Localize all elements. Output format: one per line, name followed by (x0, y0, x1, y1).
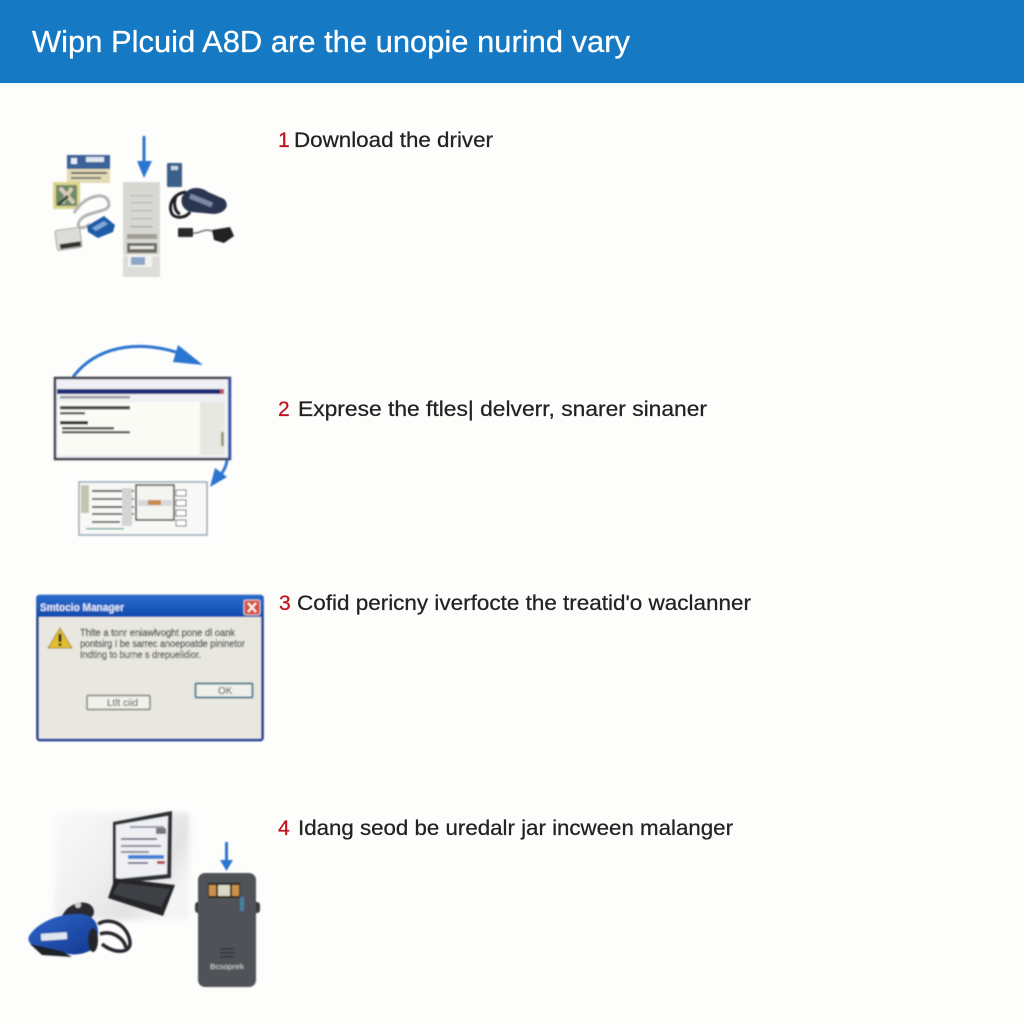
step 1 text: 1 (278, 129, 290, 152)
step 2 panel (55, 345, 707, 535)
dialog window (38, 596, 262, 740)
step 3 text: 3 (279, 592, 291, 615)
icon: lower window (79, 482, 207, 535)
icon: handheld scanner (195, 873, 260, 987)
arrow: download (137, 136, 152, 178)
button: secondary (87, 696, 150, 710)
step 4 text: 4 (278, 817, 290, 840)
icon: cable (98, 921, 130, 951)
arrow: curved top arrow (73, 345, 203, 377)
dialog message: Indting to burne s drepuelidior. (80, 650, 201, 661)
icon: warning triangle (48, 628, 72, 648)
dialog message: Thlte a tonr eniawlvoght pone dl oank (80, 628, 236, 639)
icon: program windows with arrows (55, 345, 231, 535)
step 4 text: Idang seod be uredalr jar incween malanger (298, 817, 733, 840)
icon: blue adapter (87, 216, 115, 238)
dialog title bar (37, 595, 263, 617)
arrow: lower curved arrow (210, 460, 227, 487)
icon: main window (55, 378, 231, 459)
step 3 panel (37, 592, 751, 740)
header banner (0, 0, 1024, 83)
dialog message: pontsirg I be sarrec anoepoatde pininetor (80, 639, 246, 650)
icon: central device (123, 182, 160, 277)
step 4 panel (28, 811, 733, 987)
dialog title bar: Smtocio Manager (40, 602, 125, 614)
icon: navy handset (167, 163, 182, 187)
arrow: down to scanner (220, 842, 233, 871)
button: OK: OK (218, 686, 233, 697)
step 3 text: Cofid pericny iverfocte the treatid'o waclanner (297, 592, 751, 615)
icon: handheld scanner: Bcsoprek (210, 962, 244, 971)
icon: close button (244, 600, 260, 615)
icon: white cable (74, 196, 109, 228)
title: Wipn Plcuid A8D are the unopie nurind vary (32, 24, 630, 59)
icon: monitor (108, 811, 175, 916)
icon: small black adapters (178, 227, 234, 243)
icon: silver module (55, 227, 82, 251)
icon: blue car (28, 902, 98, 957)
icon: device manager dialog (37, 595, 263, 740)
backdrop (55, 813, 189, 920)
button: secondary: Ltlt ciid (107, 698, 138, 709)
button: OK (196, 684, 252, 698)
step 2 text: 2 (278, 398, 290, 421)
step 1 panel (53, 129, 493, 277)
icon: computer, car and scanner (28, 811, 260, 987)
icon: dark cable bundle (171, 188, 227, 217)
step 2 text: Exprese the ftles| delverr, snarer sinaner (298, 398, 707, 421)
step 1 text: Download the driver (294, 129, 493, 152)
icon: scanner cards (53, 155, 110, 209)
icon: hardware kit with download arrow (53, 136, 234, 277)
dialog message (80, 628, 246, 661)
